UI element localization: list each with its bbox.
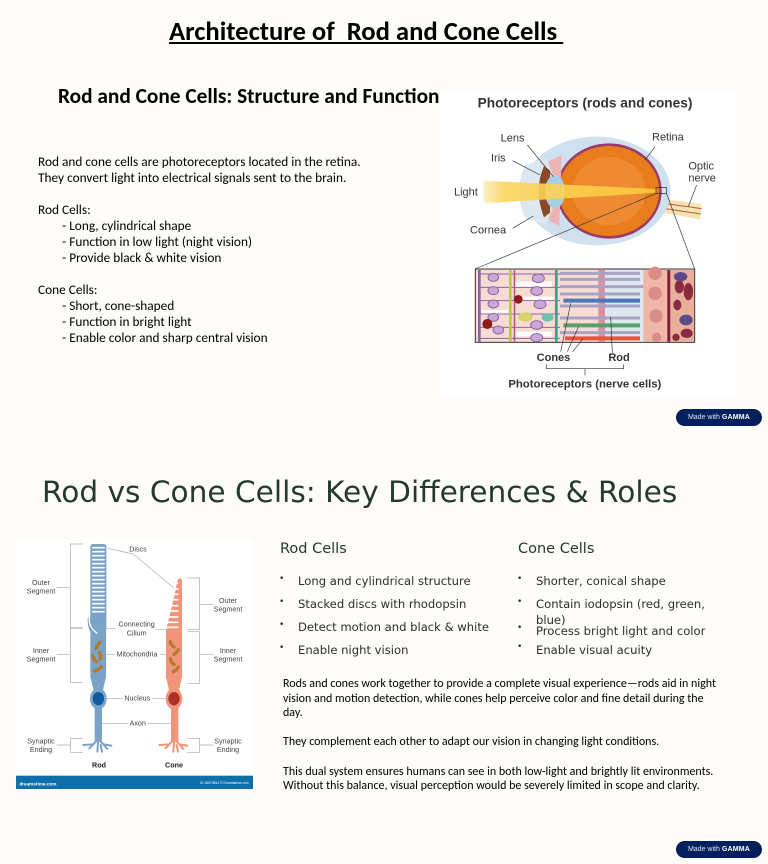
image: rod and cone cell diagram: Segment bbox=[27, 588, 55, 596]
list: cone cells: • bbox=[517, 642, 522, 652]
image: rod and cone cell diagram: Nucleus bbox=[124, 694, 151, 702]
image: rod and cone cell diagram: Segment bbox=[214, 606, 242, 614]
badge: made with gamma bbox=[676, 841, 762, 858]
image: rod and cone cell diagram: Outer bbox=[32, 579, 51, 587]
list: cone cells: Contain iodopsin (red, green, blue) bbox=[536, 597, 705, 627]
image: eye photoreceptors diagram: Retina bbox=[652, 132, 685, 144]
image: rod and cone cell diagram: Discs bbox=[129, 545, 147, 553]
badge: made with gamma: Made with GAMMA bbox=[688, 846, 750, 853]
image: rod and cone cell diagram bbox=[16, 544, 253, 789]
text block: rod and cone description: Rod and cone cells are photoreceptors located in the retina. They convert light into electrical signals sent to the brain. Rod Cells: - Long, cylindrical shape - Function in low light (night vision) - Provide black & white vision Cone Cells: - Short, cone-shaped - Function in bright light - Enable color and sharp central vision bbox=[38, 153, 361, 346]
image: rod and cone cell diagram: Rod bbox=[92, 762, 106, 770]
heading: structure and function: Rod and Cone Cells: Structure and Function bbox=[58, 83, 440, 109]
heading: rod cells: Rod Cells bbox=[280, 541, 347, 557]
image: rod and cone cell diagram: Synaptic bbox=[27, 737, 55, 745]
icon: eyeball bbox=[483, 137, 702, 245]
image: rod and cone cell diagram: ID 16073814 © Dreamstime.com bbox=[200, 781, 249, 785]
image: rod and cone cell diagram: Inner bbox=[33, 647, 50, 655]
image: eye photoreceptors diagram: Light bbox=[454, 186, 478, 198]
image: eye photoreceptors diagram: nerve bbox=[688, 172, 716, 184]
image: rod and cone cell diagram: dreamstime.com bbox=[19, 781, 56, 786]
image: eye photoreceptors diagram: Cones bbox=[537, 352, 570, 364]
icon: retina cross-section bbox=[475, 267, 695, 342]
image: eye photoreceptors diagram: Cornea bbox=[470, 224, 507, 236]
image: eye photoreceptors diagram: Photoreceptors (nerve cells) bbox=[508, 378, 662, 390]
list: cone cells: Process bright light and color bbox=[536, 624, 705, 638]
text block: summary: Rods and cones work together to provide a complete visual experience—rods aid in night vision and motion detection, while cones help perceive color and fine detail during the day. They complement each other to adapt our vision in changing light conditions. This dual system ensures humans can see in both low-light and brightly lit environments. Without this balance, visual perception would be severely limited in scope and clarity. bbox=[283, 677, 716, 793]
badge: made with gamma bbox=[676, 409, 762, 426]
list: cone cells bbox=[517, 574, 706, 657]
list: rod cells: Detect motion and black & white bbox=[298, 620, 489, 634]
list: cone cells: • bbox=[517, 574, 522, 584]
title: Architecture of Rod and Cone Cells bbox=[169, 16, 557, 48]
list: cone cells: • bbox=[517, 597, 522, 607]
image: rod and cone cell diagram: Inner bbox=[220, 647, 237, 655]
image: rod and cone cell diagram: Ending bbox=[30, 746, 52, 754]
image: rod and cone cell diagram: Synaptic bbox=[214, 737, 242, 745]
image: rod and cone cell diagram: Segment bbox=[214, 656, 242, 664]
image: eye photoreceptors diagram: Iris bbox=[491, 152, 506, 164]
image: rod and cone cell diagram: Mitochondria bbox=[117, 650, 157, 658]
list: cone cells: • bbox=[517, 623, 522, 633]
list: rod cells: • bbox=[279, 643, 284, 653]
image: rod and cone cell diagram: Connecting bbox=[119, 621, 155, 629]
image: eye photoreceptors diagram bbox=[454, 96, 716, 390]
image: rod and cone cell diagram: Segment bbox=[27, 656, 55, 664]
image: rod and cone cell diagram: Outer bbox=[219, 597, 238, 605]
image: eye photoreceptors diagram: Photoreceptors (rods and cones) bbox=[478, 96, 692, 111]
heading: key differences: Rod vs Cone Cells: Key Differences & Roles bbox=[42, 475, 677, 509]
list: cone cells: Shorter, conical shape bbox=[536, 574, 666, 588]
icon: rod cell bbox=[83, 544, 111, 752]
image: rod and cone cell diagram: Ending bbox=[217, 746, 239, 754]
list: rod cells: Enable night vision bbox=[298, 643, 408, 657]
list: rod cells: Long and cylindrical structure bbox=[298, 574, 471, 588]
heading: cone cells: Cone Cells bbox=[518, 541, 594, 557]
image: eye photoreceptors diagram: Optic bbox=[688, 160, 715, 172]
list: rod cells: • bbox=[279, 620, 284, 630]
list: rod cells: • bbox=[279, 597, 284, 607]
badge: made with gamma: Made with GAMMA bbox=[688, 414, 750, 421]
list: rod cells bbox=[279, 574, 489, 657]
image: eye photoreceptors diagram: Rod bbox=[608, 352, 630, 364]
image: eye photoreceptors diagram: Lens bbox=[501, 133, 525, 145]
list: cone cells: Enable visual acuity bbox=[536, 643, 652, 657]
image: rod and cone cell diagram: Axon bbox=[130, 719, 146, 727]
icon: cone cell bbox=[159, 578, 187, 752]
image: rod and cone cell diagram: Cone bbox=[165, 762, 183, 770]
list: rod cells: • bbox=[279, 574, 284, 584]
image: rod and cone cell diagram: Cilium bbox=[127, 629, 147, 637]
list: rod cells: Stacked discs with rhodopsin bbox=[298, 597, 466, 611]
